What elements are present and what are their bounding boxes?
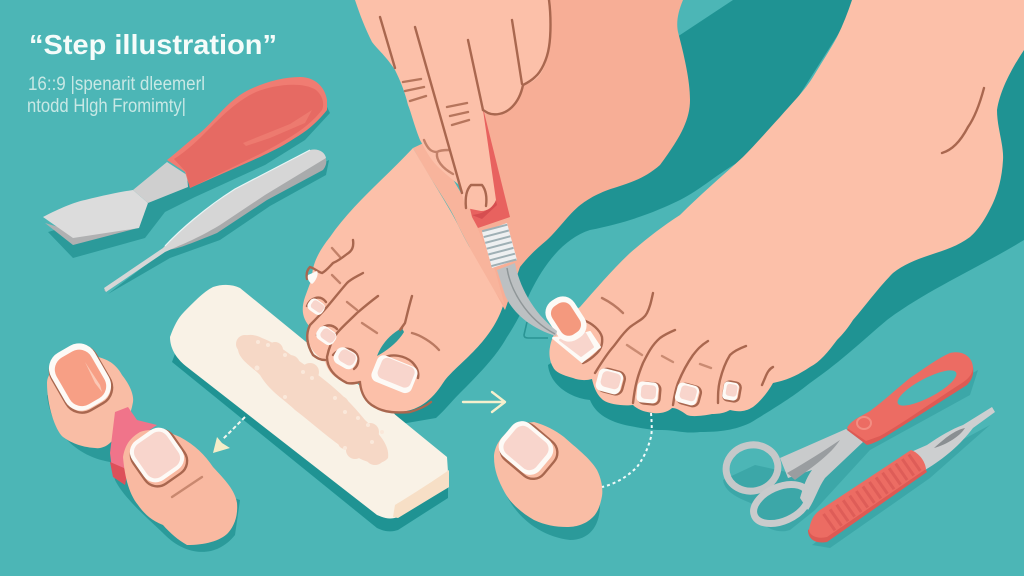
pad end face — [393, 470, 449, 518]
icon: scissors and nail tool — [722, 352, 995, 548]
icon: large toenail under treatment — [540, 291, 602, 363]
panel: center foot — [303, 140, 505, 412]
icon: right foot toenails — [594, 367, 741, 408]
pad body — [170, 285, 449, 518]
text: title: “Step illustration” — [29, 29, 277, 60]
file tool metal — [911, 407, 995, 470]
toe creases — [307, 240, 439, 412]
fingernail — [466, 185, 486, 208]
upper nail — [43, 339, 119, 419]
upper toe — [47, 355, 133, 448]
scraper handle — [167, 77, 327, 188]
pink wrap — [110, 407, 157, 484]
finger rings — [722, 440, 782, 496]
handle slot — [893, 364, 961, 412]
icon: red tool held in hand — [468, 108, 557, 336]
dotted connector curve — [602, 413, 652, 487]
scissor blades — [780, 429, 863, 510]
panel: right foot — [549, 0, 1024, 416]
scraper shadow — [48, 107, 330, 258]
icon: scraper tool — [43, 77, 330, 258]
right foot toe creases — [595, 88, 984, 405]
shadows — [723, 370, 978, 531]
panel: cream pad — [170, 285, 449, 531]
shadow — [47, 395, 240, 552]
file tool handle — [808, 460, 927, 542]
shadow: behind center leg and foot — [395, 0, 860, 425]
icon: center foot toenails — [305, 271, 420, 395]
tool curved tip — [497, 263, 557, 336]
panel: center leg — [450, 0, 690, 310]
arrow: pointing right — [463, 392, 505, 412]
text: subtitle lines: ntodd Hlgh Fromimty| — [27, 96, 186, 117]
pad shadow — [172, 340, 448, 531]
small teal tool outline — [524, 322, 548, 338]
shadow: under right foot — [548, 40, 1024, 433]
panel: hand — [355, 0, 551, 211]
toe crease — [172, 477, 202, 497]
file tool shadow — [812, 425, 990, 548]
scraper blade — [45, 214, 144, 245]
icon: metal probe tool — [104, 149, 329, 294]
pad texture — [236, 335, 388, 465]
text: subtitle lines: 16::9 |spenarit dleemerl — [28, 74, 205, 95]
tool coil — [482, 223, 517, 268]
text: subtitle lines — [27, 74, 205, 117]
icon: detached toe with pale nail — [493, 416, 602, 540]
lower toe — [123, 430, 237, 545]
icon: detached toe with pink wrap — [42, 337, 240, 552]
file tool ribs — [828, 461, 917, 523]
arrow: dashed pointing to toe — [213, 417, 245, 453]
fold shading — [413, 140, 505, 306]
gap between toes — [377, 328, 404, 356]
scraper ferrule — [133, 162, 188, 203]
finger lines — [380, 0, 550, 193]
red scissor handle — [847, 367, 973, 445]
handle rivet — [857, 417, 871, 429]
lower nail — [125, 424, 193, 492]
